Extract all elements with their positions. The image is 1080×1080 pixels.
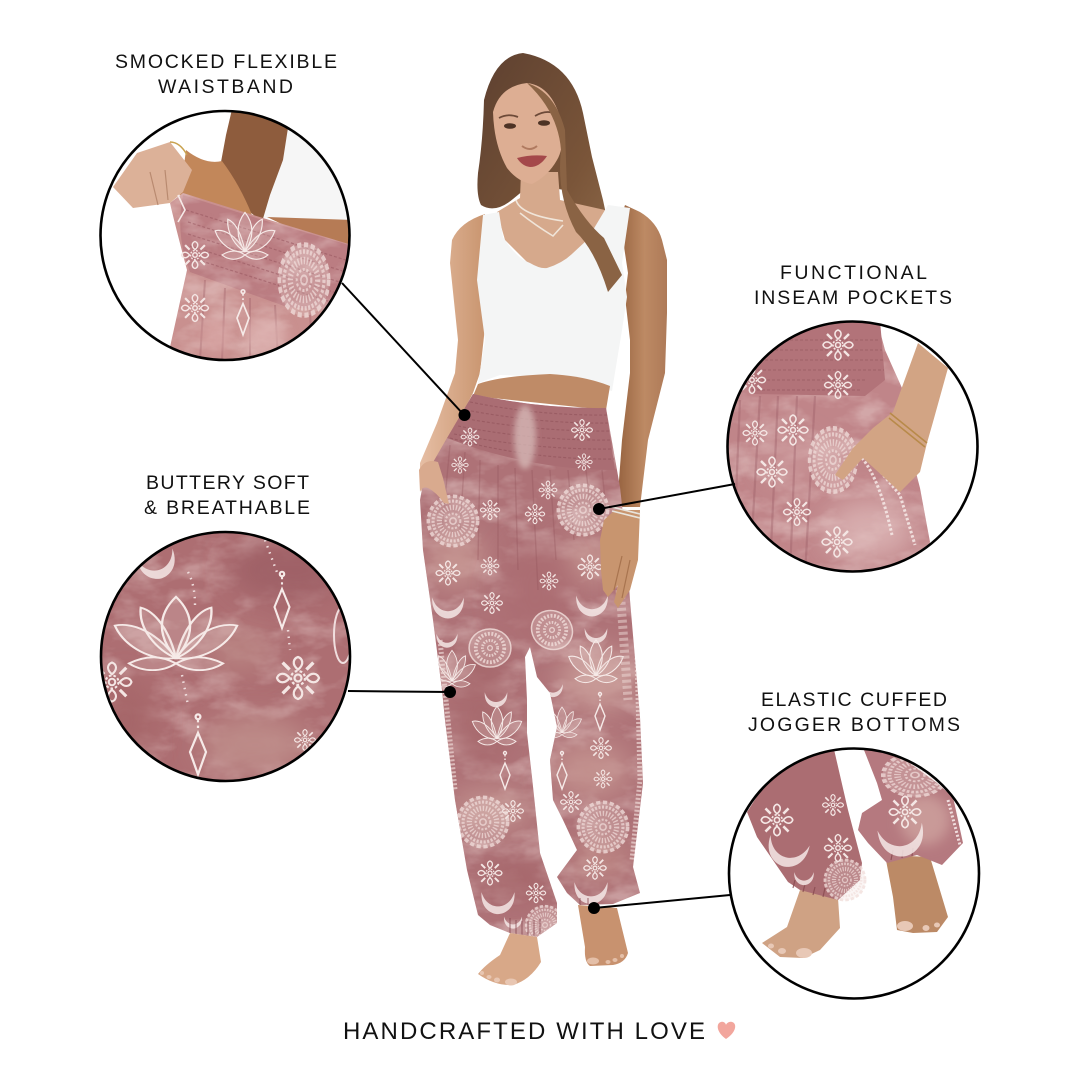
heading [748, 689, 960, 736]
face features [499, 112, 554, 167]
face [493, 83, 563, 184]
callout: elastic cuffed jogger bottoms [588, 689, 981, 1001]
detail circle [100, 105, 355, 365]
heading: ELASTIC CUFFED [761, 689, 947, 711]
heading: INSEAM POCKETS [754, 287, 952, 309]
heading: & BREATHABLE [144, 497, 310, 519]
heading: BUTTERY SOFT [146, 472, 309, 494]
leader line and dot [348, 686, 456, 698]
right arm [617, 205, 667, 507]
callout: buttery soft and breathable [92, 472, 456, 784]
detail circle [92, 530, 352, 784]
heading [144, 472, 310, 519]
necklace [516, 200, 563, 236]
back hair [477, 53, 622, 290]
pattern motifs [428, 457, 640, 944]
model figure wearing the pants [410, 53, 667, 986]
footer tagline: HANDCRAFTED WITH LOVE [343, 1018, 705, 1045]
gathers under the waistband [442, 445, 606, 590]
smocked waistband [447, 394, 615, 470]
heading [754, 262, 952, 309]
neck and chest [497, 172, 605, 275]
white crop top [477, 205, 630, 391]
left foot [478, 933, 541, 986]
jogger cuff elastic [510, 898, 588, 936]
callout: functional inseam pockets [593, 262, 981, 575]
right foot [578, 905, 628, 966]
left arm [420, 214, 485, 502]
tie-dye patches [420, 419, 642, 936]
midriff [473, 374, 610, 410]
heading: JOGGER BOTTOMS [748, 714, 960, 736]
heading: SMOCKED FLEXIBLE [115, 51, 337, 73]
leader line and dot [588, 895, 730, 914]
heading: WAISTBAND [158, 76, 293, 98]
heading: FUNCTIONAL [780, 262, 927, 284]
front hair lock [527, 83, 622, 292]
leader line and dot [342, 283, 470, 421]
hand in pocket [419, 461, 449, 504]
harem pants [410, 385, 650, 945]
detail circle [725, 320, 981, 575]
heading [115, 51, 337, 98]
leader line and dot [593, 484, 735, 515]
detail circle [727, 745, 981, 1001]
hand on thigh [600, 507, 640, 608]
icon: heart [718, 1022, 735, 1039]
callout: smocked flexible waistband [100, 51, 470, 421]
